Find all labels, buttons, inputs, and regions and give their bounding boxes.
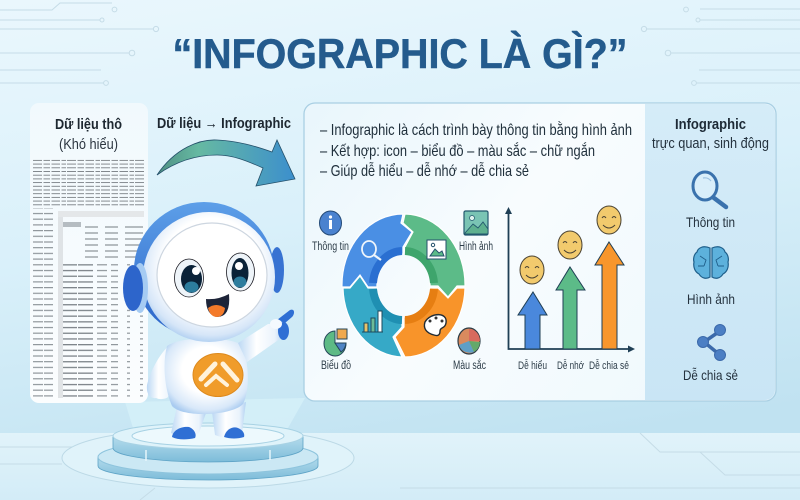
- panel: raw data: [30, 103, 148, 403]
- label: colour: Màu sắc: [453, 359, 486, 372]
- eyes: [174, 253, 254, 297]
- raw spreadsheet: [33, 208, 144, 398]
- chart labels: Dễ chia sẻ: [589, 359, 629, 372]
- left ear: [123, 263, 148, 313]
- donut cycle chart: [342, 214, 465, 357]
- left leg: [171, 402, 206, 437]
- bar: easy to share: [595, 242, 624, 349]
- icon: colour swatch: [458, 328, 480, 354]
- feet: [172, 427, 196, 439]
- arrow: data to infographic: [157, 140, 295, 186]
- side panel background: [645, 104, 775, 400]
- chart labels: Dễ nhớ: [557, 359, 584, 372]
- label: information: Thông tin: [312, 241, 349, 253]
- left arm: [147, 343, 176, 399]
- pointing hand: [270, 310, 294, 340]
- right arm: [238, 324, 284, 362]
- label: picture: Hình ảnh: [459, 241, 493, 253]
- right leg: [212, 402, 246, 438]
- bullet list: – Giúp dễ hiểu – dễ nhớ – dễ chia sẻ: [320, 161, 529, 180]
- right ear: [270, 247, 284, 293]
- side subheading: trực quan, sinh động: [652, 136, 769, 152]
- face ring: [157, 223, 267, 327]
- axes: [508, 210, 630, 349]
- label: chart: Biểu đồ: [321, 360, 351, 372]
- label: picture: Hình ảnh: [687, 291, 735, 307]
- icon: image: [427, 240, 446, 259]
- icon: palette: [424, 315, 446, 336]
- donut labels and icons: [312, 211, 493, 372]
- platform: [62, 423, 354, 488]
- label: information: Thông tin: [686, 214, 735, 230]
- bullet list: – Kết hợp: icon – biểu đồ – màu sắc – chữ ngắn: [320, 141, 595, 160]
- segment: teal: [343, 276, 402, 357]
- icon: search: [362, 241, 381, 260]
- helmet: [134, 202, 274, 338]
- bullet list: – Infographic là cách trình bày thông tin bằng hình ảnh: [320, 120, 632, 139]
- title: “INFOGRAPHIC LÀ GÌ?”: [172, 30, 628, 77]
- robot mascot: [123, 202, 294, 439]
- mouth: [206, 294, 229, 317]
- chest logo: [193, 354, 243, 396]
- segment: blue: [342, 214, 412, 287]
- side heading: Infographic: [675, 117, 746, 133]
- panel: infographic: [304, 103, 776, 401]
- subheading: hard to understand: (Khó hiểu): [59, 136, 118, 153]
- body: [165, 338, 248, 414]
- chart labels: Dễ hiểu: [518, 359, 547, 372]
- label: share: Dễ chia sẻ: [683, 367, 738, 383]
- bullet list: [320, 120, 632, 180]
- bar: easy to remember: [556, 267, 585, 349]
- side panel content: [652, 117, 769, 383]
- segment: green: [403, 214, 465, 297]
- heading: raw data: Dữ liệu thô: [55, 116, 122, 133]
- icon: info: [320, 211, 342, 235]
- icon: brain: [694, 247, 728, 278]
- icon: picture: [464, 211, 488, 235]
- bar: easy to understand: [518, 292, 547, 349]
- smileys: [520, 206, 621, 284]
- icon: magnifier: [693, 172, 726, 207]
- beam of light: [125, 398, 305, 428]
- heading: data to infographic: Dữ liệu → Infographic: [157, 115, 291, 132]
- icon: bars: [362, 311, 383, 332]
- arrow bar chart: [505, 206, 635, 372]
- segment: orange: [395, 288, 465, 357]
- icon: pie chart: [324, 329, 347, 356]
- icon: share: [698, 324, 726, 360]
- raw text paragraph: [33, 159, 144, 207]
- head: [143, 212, 275, 342]
- chart labels: [518, 359, 629, 372]
